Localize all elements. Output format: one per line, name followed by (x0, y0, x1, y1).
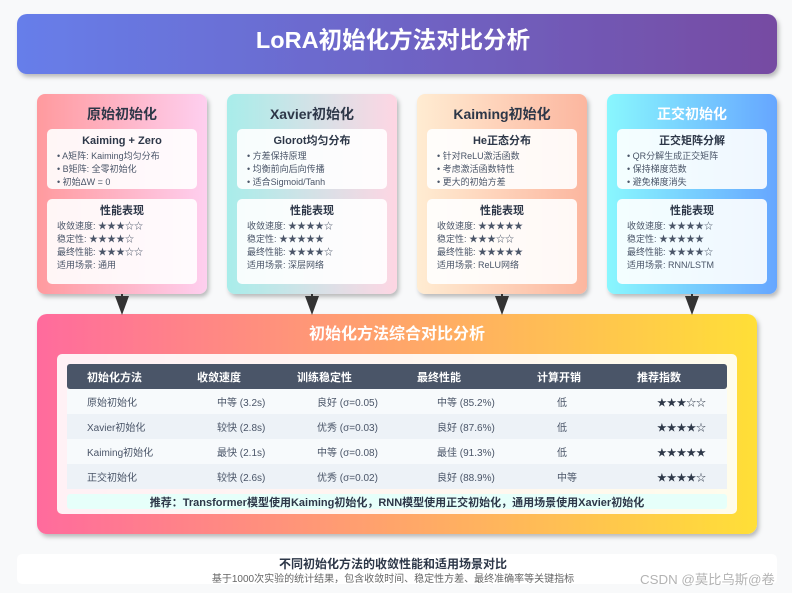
comparison table: 良好 (87.6%) (437, 421, 495, 434)
comparison table: 中等 (557, 471, 577, 484)
comparison table: 优秀 (σ=0.02) (317, 471, 378, 484)
comparison table: 计算开销 (537, 370, 581, 384)
performance box: 正交初始化: 收敛速度: ★★★★☆ (627, 220, 713, 231)
performance box: Xavier初始化: 适用场景: 深层网络 (247, 259, 324, 270)
performance box: 正交初始化: 适用场景: RNN/LSTM (627, 260, 714, 270)
performance box: Kaiming初始化: 稳定性: ★★★☆☆ (437, 233, 514, 244)
title banner: LoRA初始化方法对比分析 (256, 26, 530, 53)
footer note: 基于1000次实验的统计结果，包含收敛时间、稳定性方差、最终准确率等关键指标 (212, 572, 574, 585)
comparison table: ★★★★★ (657, 448, 706, 459)
title banner (17, 14, 777, 74)
panel heading: 初始化方法综合对比分析 (309, 324, 485, 343)
comparison table: 较快 (2.6s) (217, 471, 265, 484)
panel: Xavier初始化: Xavier初始化 (270, 106, 354, 122)
method box: Kaiming + Zero (47, 129, 197, 189)
performance box: Kaiming初始化 (427, 199, 577, 284)
panel: 原始初始化: 原始初始化 (87, 106, 157, 122)
method box: Kaiming + Zero: • 初始ΔW = 0 (57, 176, 110, 187)
performance box: Xavier初始化: 性能表现 (290, 203, 334, 217)
panel: 正交初始化 (607, 94, 777, 294)
comparison table: 最终性能 (417, 370, 461, 384)
comparison table: Kaiming初始化 (87, 446, 153, 459)
performance box: Kaiming初始化: 最终性能: ★★★★★ (437, 246, 523, 257)
performance box: Xavier初始化: 收敛速度: ★★★★☆ (247, 220, 333, 231)
comparison table: 低 (557, 421, 567, 434)
comparison table: 较快 (2.8s) (217, 421, 265, 434)
performance box: 原始初始化: 性能表现 (100, 203, 144, 217)
method box: 正交矩阵分解: • QR分解生成正交矩阵 (627, 150, 718, 161)
comparison table: 低 (557, 396, 567, 409)
comparison table: 良好 (88.9%) (437, 471, 495, 484)
panel: 原始初始化 (37, 94, 207, 294)
performance box: Xavier初始化 (237, 199, 387, 284)
method box: 正交矩阵分解 (617, 129, 767, 189)
performance box: 原始初始化: 收敛速度: ★★★☆☆ (57, 220, 143, 231)
method box: He正态分布 (427, 129, 577, 189)
performance box: 原始初始化: 最终性能: ★★★☆☆ (57, 246, 143, 257)
method box: He正态分布: • 更大的初始方差 (437, 176, 506, 187)
method box: Kaiming + Zero: • A矩阵: Kaiming均匀分布 (57, 150, 160, 161)
comparison table: 初始化方法 (87, 370, 142, 384)
arrow: Kaiming初始化 to comparison (495, 294, 509, 315)
comparison table: ★★★★☆ (657, 422, 706, 434)
performance box: 正交初始化: 性能表现 (670, 203, 714, 217)
footer note: 不同初始化方法的收敛性能和适用场景对比 (279, 556, 507, 571)
method box: Glorot均匀分布: Glorot均匀分布 (274, 133, 350, 147)
comparison table: 正交初始化 (87, 471, 137, 484)
method box: Glorot均匀分布 (237, 129, 387, 189)
arrow: 原始初始化 to comparison (115, 294, 129, 315)
method box: Glorot均匀分布: • 均衡前向后向传播 (247, 163, 325, 174)
method box: He正态分布: • 考虑激活函数特性 (437, 163, 515, 174)
performance box: Kaiming初始化: 性能表现 (480, 203, 524, 217)
panel: Xavier初始化 (227, 94, 397, 294)
method box: Glorot均匀分布: • 适合Sigmoid/Tanh (247, 176, 325, 187)
comparison table: 中等 (85.2%) (437, 396, 495, 409)
method box: He正态分布: • 针对ReLU激活函数 (437, 150, 520, 161)
comparison table: 中等 (3.2s) (217, 396, 265, 409)
panel: Kaiming初始化 (417, 94, 587, 294)
performance box: 原始初始化: 稳定性: ★★★★☆ (57, 233, 134, 244)
method box: He正态分布: He正态分布 (473, 133, 531, 147)
method box: 正交矩阵分解: • 避免梯度消失 (627, 176, 687, 187)
performance box: 原始初始化 (47, 199, 197, 284)
comparison table: ★★★★☆ (657, 472, 706, 484)
comparison table: ★★★☆☆ (657, 397, 706, 409)
comparison table: Xavier初始化 (87, 421, 145, 434)
performance box: Kaiming初始化: 收敛速度: ★★★★★ (437, 220, 523, 231)
performance box: Kaiming初始化: 适用场景: ReLU网络 (437, 259, 519, 270)
comparison table: 最快 (2.1s) (217, 447, 265, 459)
comparison table: 最佳 (91.3%) (437, 446, 495, 459)
performance box: 正交初始化: 稳定性: ★★★★★ (627, 233, 704, 244)
performance box: 正交初始化: 最终性能: ★★★★☆ (627, 246, 713, 257)
comparison table: 低 (557, 446, 567, 459)
method box: 正交矩阵分解: • 保持梯度范数 (627, 163, 687, 174)
arrow: 正交初始化 to comparison (685, 294, 699, 315)
watermark: CSDN @莫比乌斯@卷 (640, 572, 775, 587)
panel: Kaiming初始化: Kaiming初始化 (453, 106, 551, 122)
arrow: Xavier初始化 to comparison (305, 294, 319, 315)
comparison table: 中等 (σ=0.08) (317, 446, 378, 459)
comparison table: 收敛速度 (197, 370, 241, 384)
performance box: 原始初始化: 适用场景: 通用 (57, 260, 116, 270)
performance box: Xavier初始化: 最终性能: ★★★★☆ (247, 246, 333, 257)
comparison table: 推荐指数 (637, 370, 681, 384)
method box: 正交矩阵分解: 正交矩阵分解 (659, 133, 725, 147)
footer note (17, 554, 777, 585)
panel: 正交初始化: 正交初始化 (657, 106, 727, 122)
comparison table: 优秀 (σ=0.03) (317, 421, 378, 434)
comparison table: 良好 (σ=0.05) (317, 396, 378, 409)
performance box: 正交初始化 (617, 199, 767, 284)
panel: 综合对比 (37, 314, 757, 534)
comparison table (57, 354, 737, 514)
performance box: Xavier初始化: 稳定性: ★★★★★ (247, 233, 324, 244)
recommendation callout (67, 494, 727, 509)
comparison table: 训练稳定性 (297, 370, 352, 384)
comparison table: 原始初始化 (87, 396, 137, 409)
recommendation callout: 推荐：Transformer模型使用Kaiming初始化，RNN模型使用正交初始化，通用场景使用Xavier初始化 (150, 495, 644, 509)
method box: Kaiming + Zero: Kaiming + Zero (82, 135, 162, 147)
method box: Kaiming + Zero: • B矩阵: 全零初始化 (57, 163, 137, 174)
method box: Glorot均匀分布: • 方差保持原理 (247, 150, 307, 161)
